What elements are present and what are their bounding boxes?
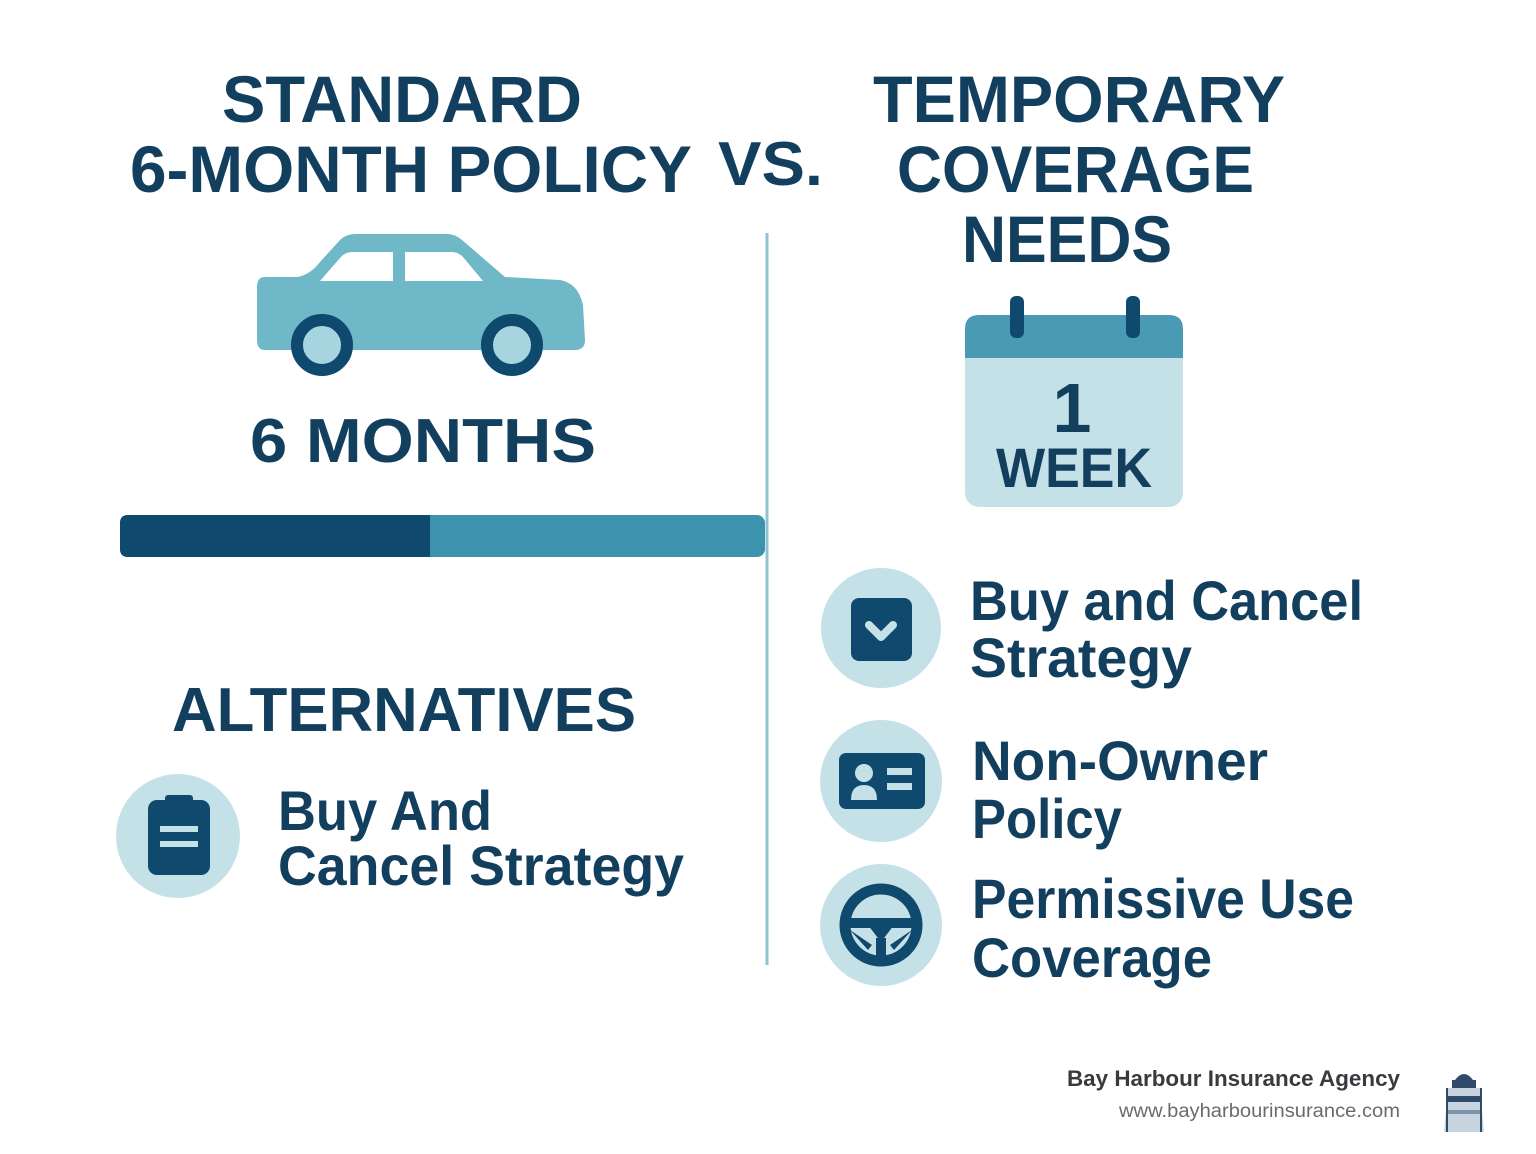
footer: agency name: www.bayharbourinsurance.com — [1118, 1101, 1400, 1122]
label: 6 months: 6 MONTHS — [250, 407, 596, 476]
footer: agency name — [1067, 1066, 1401, 1122]
divider — [766, 233, 768, 965]
alternative item: buy and cancel — [116, 774, 684, 898]
option: buy and cancel strategy — [821, 568, 1363, 689]
title right — [873, 62, 1285, 276]
title left — [130, 62, 692, 206]
option: permissive use coverage: Coverage — [972, 926, 1212, 989]
footer: agency name: Bay Harbour Insurance Agency — [1067, 1066, 1401, 1091]
option: non-owner policy: Non-Owner — [972, 729, 1268, 792]
option: buy and cancel strategy: Strategy — [970, 626, 1192, 689]
title left: STANDARD — [222, 62, 582, 136]
option: non-owner policy: Policy — [972, 787, 1122, 850]
duration bar — [120, 515, 765, 557]
vs label: VS. — [718, 130, 823, 199]
title right: NEEDS — [962, 202, 1172, 276]
option: buy and cancel strategy: Buy and Cancel — [970, 569, 1363, 632]
option: permissive use coverage — [820, 864, 1354, 989]
icon: calendar: 1 — [1053, 369, 1091, 447]
alternative item: buy and cancel: Buy And — [278, 779, 492, 842]
heading: alternatives: ALTERNATIVES — [172, 676, 636, 745]
icon: lighthouse logo — [1444, 1074, 1484, 1132]
icon: calendar — [965, 296, 1183, 507]
option: permissive use coverage: Permissive Use — [972, 867, 1354, 930]
alternative item: buy and cancel: Cancel Strategy — [278, 834, 684, 897]
option: non-owner policy — [820, 720, 1268, 850]
title left: 6-MONTH POLICY — [130, 132, 692, 206]
icon: calendar: WEEK — [996, 436, 1152, 499]
icon: car — [257, 234, 585, 370]
title right: TEMPORARY — [873, 62, 1285, 136]
title right: COVERAGE — [897, 132, 1254, 206]
